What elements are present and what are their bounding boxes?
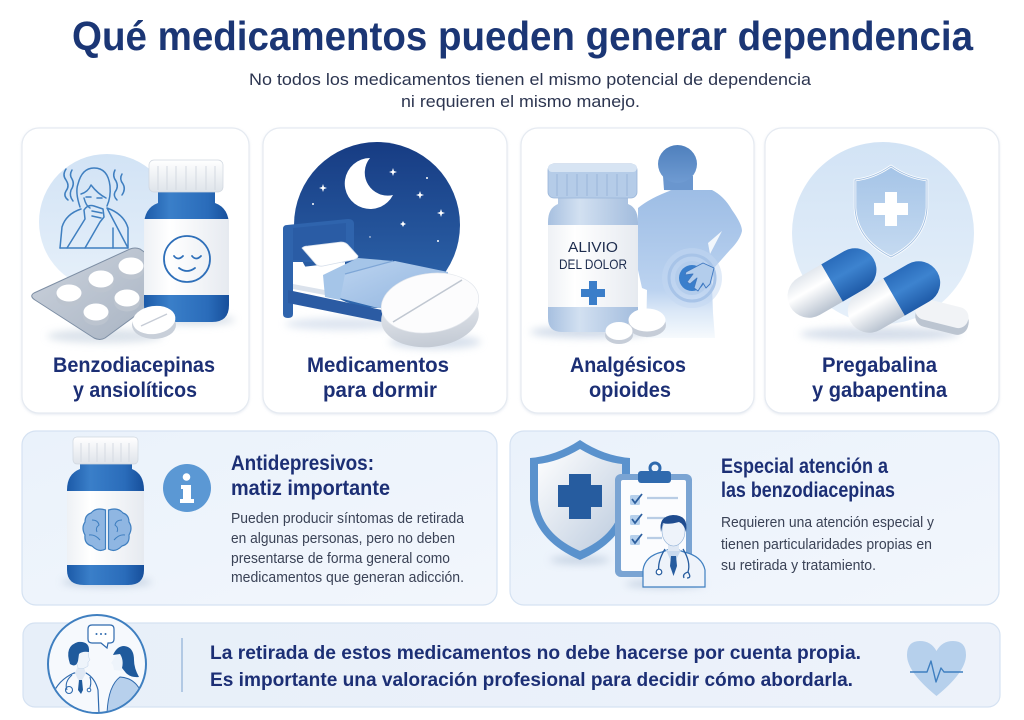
- icon: pale bottle labelled alivio del dolor: ALIVIO: [568, 239, 618, 256]
- icon: person with back pain: [638, 145, 742, 338]
- icon: clipboard checklist: [615, 463, 705, 588]
- panel: bottom message: [23, 615, 1000, 714]
- text: especial atención body: [721, 515, 935, 574]
- title: Qué medicamentos pueden generar dependencia: [72, 13, 974, 59]
- text: antidepresivos body: medicamentos que generan adicción.: [231, 570, 464, 586]
- panel: medicamentos para dormir: [263, 128, 507, 413]
- icon: doctor: [643, 515, 705, 587]
- icon: blister pack: [32, 248, 163, 343]
- icon: night sky: [294, 142, 460, 308]
- divider: [181, 638, 183, 692]
- text: bottom message: Es importante una valoración profesional para decidir cómo abordarla.: [210, 670, 853, 691]
- icon: pale bottle labelled alivio del dolor: [530, 164, 650, 338]
- text: especial atención body: su retirada y tratamiento.: [721, 558, 876, 574]
- text: bottom message: [210, 643, 861, 691]
- icon: pale bottle labelled alivio del dolor: DEL DOLOR: [559, 256, 627, 272]
- icon: shield in circle: [792, 142, 974, 324]
- icon: white tablet: [131, 303, 177, 339]
- icon: blue bottle with smiling face: [144, 160, 235, 325]
- text: antidepresivos body: en algunas personas, pero no deben: [231, 531, 455, 547]
- label: pregabalina y gabapentina: y gabapentina: [812, 379, 947, 402]
- label: benzodiacepinas: Benzodiacepinas: [53, 354, 215, 377]
- icon: bed: [283, 219, 448, 330]
- panel: pregabalina y gabapentina: [765, 128, 999, 413]
- label: medicamentos para dormir: Medicamentos: [307, 354, 449, 377]
- label: medicamentos para dormir: [307, 354, 449, 402]
- subtitle: ni requieren el mismo manejo.: [401, 92, 640, 111]
- subtitle: No todos los medicamentos tienen el mismo potencial de dependencia: [249, 70, 812, 89]
- heading: antidepresivos: Antidepresivos:: [231, 452, 374, 475]
- icon: anxious person: [39, 154, 175, 290]
- heading: especial atención: Especial atención a: [721, 455, 888, 478]
- label: analgésicos opioides: [570, 354, 686, 402]
- icon: shield with cross: [530, 440, 630, 564]
- icon: flat tablet: [800, 297, 971, 341]
- label: pregabalina y gabapentina: [812, 354, 947, 402]
- panel: benzodiacepinas y ansiolíticos: [22, 128, 249, 413]
- icon: capsule one: [780, 240, 884, 326]
- text: bottom message: La retirada de estos medicamentos no debe hacerse por cuenta propia.: [210, 643, 861, 664]
- panel: analgésicos opioides: [521, 128, 754, 413]
- label: analgésicos opioides: Analgésicos: [570, 354, 686, 377]
- text: antidepresivos body: presentarse de forma general como: [231, 551, 450, 567]
- icon: capsule two: [840, 253, 948, 341]
- panel: especial atención: [510, 431, 999, 605]
- icon: heart with pulse: [907, 641, 966, 696]
- text: especial atención body: tienen particularidades propias en: [721, 537, 932, 553]
- icon: large tablet: [377, 267, 483, 352]
- icon: brain: [83, 509, 131, 550]
- heading: especial atención: las benzodiacepinas: [721, 479, 895, 502]
- heading: antidepresivos: matiz importante: [231, 477, 390, 500]
- text: especial atención body: Requieren una atención especial y: [721, 515, 935, 531]
- icon: info: [163, 464, 211, 512]
- text: antidepresivos body: Pueden producir síntomas de retirada: [231, 511, 465, 527]
- label: pregabalina y gabapentina: Pregabalina: [822, 354, 937, 377]
- heading: especial atención: [721, 455, 895, 502]
- text: antidepresivos body: [231, 511, 465, 586]
- subtitle: [249, 70, 812, 111]
- label: benzodiacepinas: y ansiolíticos: [73, 379, 197, 402]
- heading: antidepresivos: [231, 452, 390, 500]
- icon: doctor and patient conversation: [48, 615, 146, 714]
- icon: bottle with brain: [62, 437, 152, 587]
- label: medicamentos para dormir: para dormir: [323, 379, 437, 402]
- icon: two tablets: [605, 308, 666, 344]
- label: benzodiacepinas: [53, 354, 215, 402]
- label: analgésicos opioides: opioides: [589, 379, 671, 402]
- panel: antidepresivos: [22, 431, 497, 605]
